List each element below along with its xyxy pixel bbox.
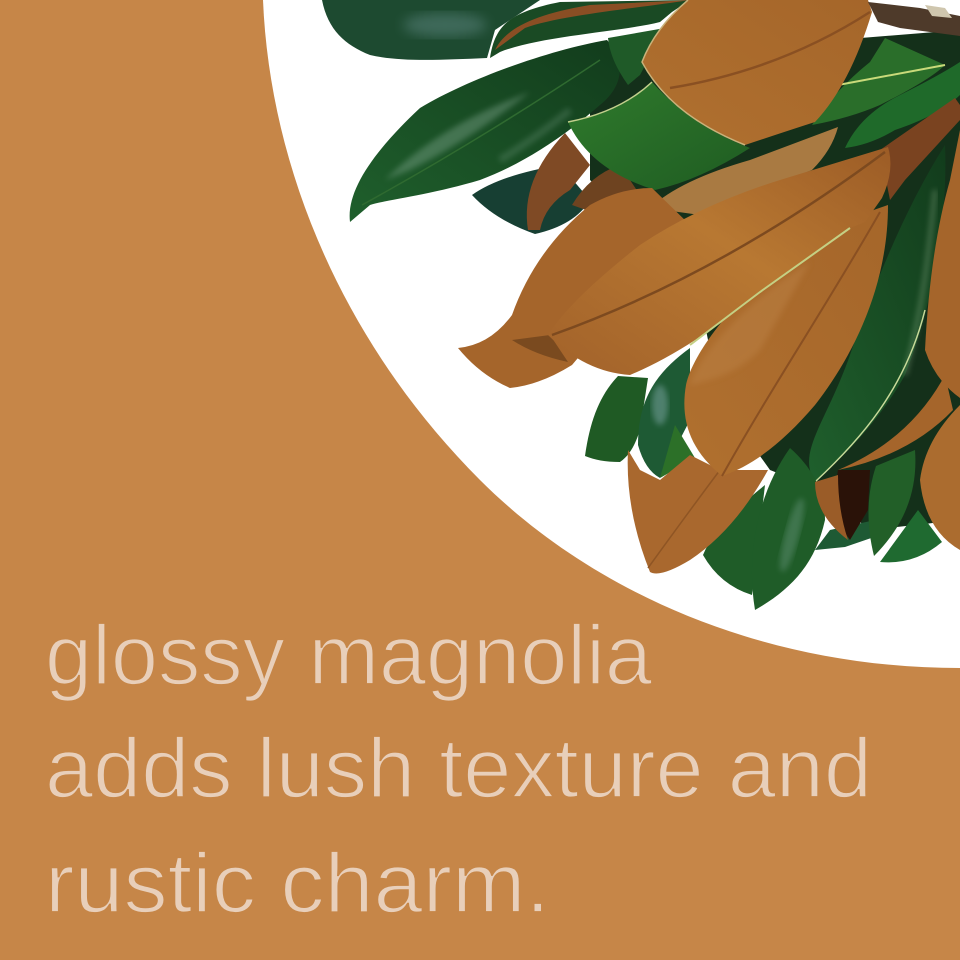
headline text: rustic charm. [45, 836, 550, 930]
white curved panel [263, 0, 960, 668]
magnolia leaf cluster [322, 0, 960, 610]
headline text [45, 608, 872, 930]
headline text: adds lush texture and [45, 721, 872, 815]
headline text: glossy magnolia [45, 608, 652, 702]
